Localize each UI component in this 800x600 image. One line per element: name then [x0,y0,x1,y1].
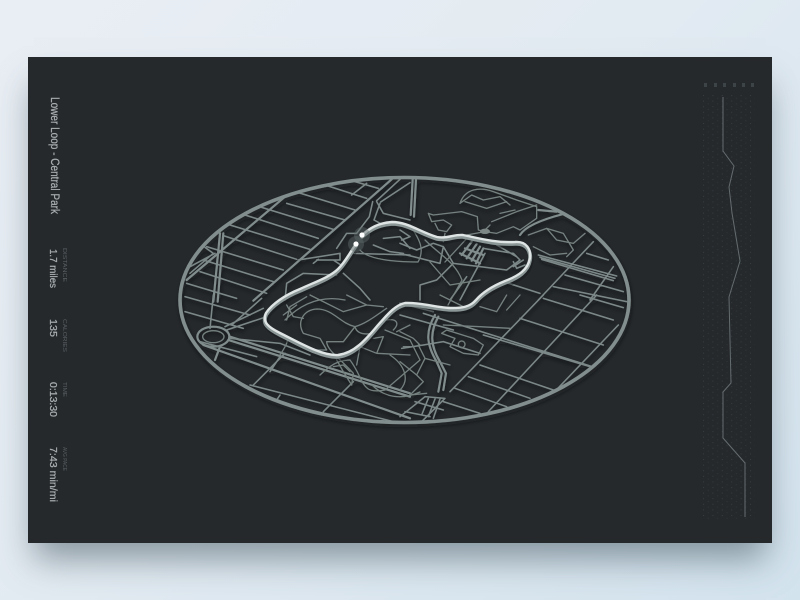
map: northwest streets and park roads [187,179,410,302]
stat: average pace: 7:43 min/mi [47,447,59,502]
stat: time: 0:13:30 [47,382,59,417]
panel: dark card [28,57,772,543]
stat: time [47,382,67,417]
stat: distance: 1.7 miles [47,249,59,288]
chart: elevation line [723,97,745,517]
marker: route start [354,227,370,243]
stat: distance [47,248,67,288]
map: southeast streets, museum and park drive [400,295,640,423]
marker: route end [348,236,364,252]
map: oval outline [180,178,629,422]
map: northeast park roads and streets [400,179,627,302]
stat: calories [47,319,67,352]
chart: axis tick markers [704,83,754,87]
stat: average pace: AVG PACE [61,447,67,471]
title: route name: Lower Loop - Central Park [48,97,60,214]
stat: calories: CALORIES [61,319,67,352]
map: Central Park oval street map [180,178,640,423]
route: running loop highlighted [265,222,531,359]
map: central park inner paths [285,225,480,397]
stat: distance: DISTANCE [61,248,67,282]
stat: calories: 135 [47,319,59,337]
map: southwest circle, streets and park roads [185,295,410,423]
chart: dot grid [703,95,755,520]
stat: average pace [47,447,67,502]
stat: time: TIME [61,382,67,397]
chart: elevation profile [703,83,755,520]
